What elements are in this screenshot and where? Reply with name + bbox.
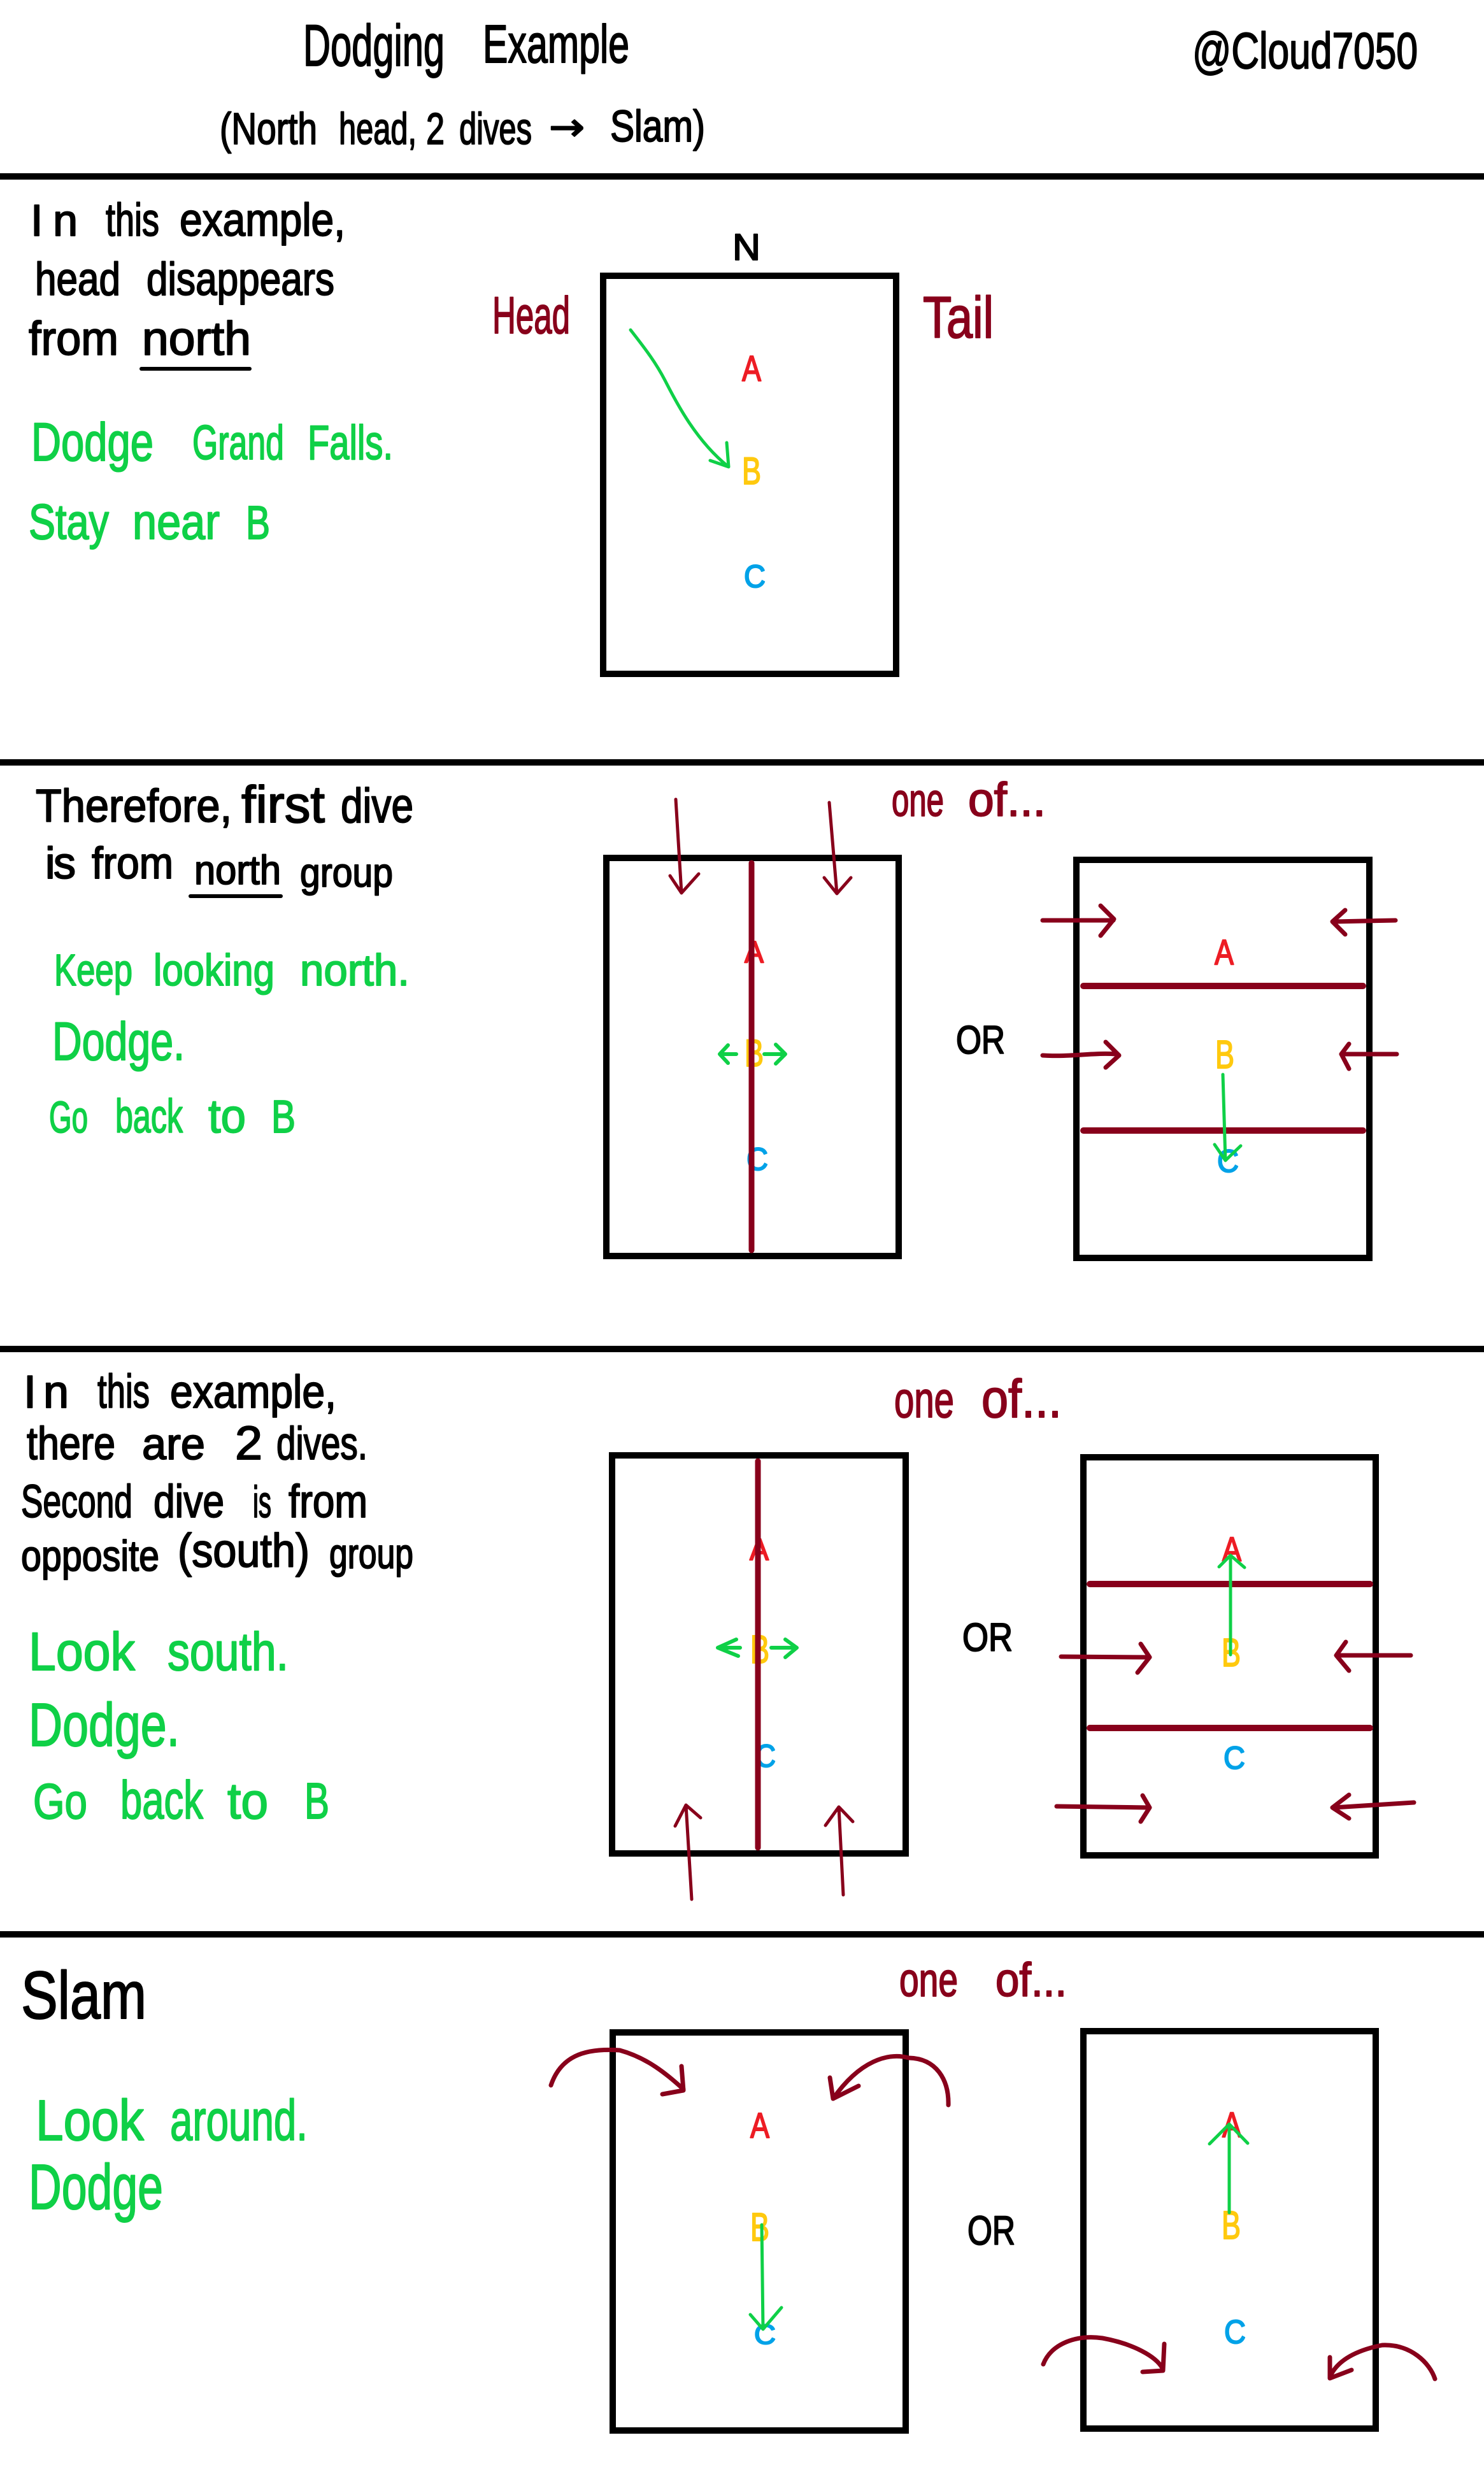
label: one of bbox=[894, 1369, 1062, 1429]
text block: green instructions: B bbox=[271, 1092, 296, 1143]
title: Dodging bbox=[303, 13, 445, 78]
text block: first dive explanation bbox=[36, 776, 413, 896]
label: one of: one bbox=[892, 775, 944, 826]
markers bbox=[745, 936, 768, 1177]
subtitle bbox=[220, 101, 705, 153]
text block: green instructions: Look bbox=[29, 1622, 136, 1681]
title: Example bbox=[483, 14, 629, 74]
text block: green instruction: Dodge bbox=[31, 412, 153, 472]
markers: C bbox=[1217, 1143, 1239, 1179]
markers: B bbox=[745, 1032, 764, 1074]
text block: green instructions: Dodge bbox=[29, 2152, 163, 2223]
subtitle: Slam) bbox=[610, 101, 705, 151]
diagram: east-west lines AoE bbox=[1057, 1457, 1414, 1855]
text block: first dive explanation: Therefore, bbox=[36, 781, 232, 832]
text block: second dive explanation: there bbox=[27, 1418, 115, 1469]
text block: green instructions: Go bbox=[33, 1773, 87, 1829]
label: head: Head bbox=[492, 287, 570, 345]
arrow: dodge north bbox=[1219, 1555, 1245, 1655]
markers bbox=[750, 1533, 776, 1774]
markers bbox=[1222, 1531, 1245, 1776]
text block: green instructions: back bbox=[120, 1770, 204, 1830]
markers: A bbox=[1222, 1531, 1241, 1569]
subtitle: dives bbox=[459, 104, 532, 153]
line attacks bbox=[1083, 986, 1363, 1131]
text block: second dive explanation: example, bbox=[170, 1367, 336, 1418]
text block: green instruction: B bbox=[246, 496, 270, 549]
diagram: slam from north bbox=[551, 2032, 948, 2430]
panel: slam bbox=[21, 1953, 1435, 2430]
label: one of bbox=[899, 1953, 1067, 2006]
markers: C bbox=[754, 2319, 776, 2350]
text block: green instructions: around. bbox=[170, 2089, 308, 2153]
subtitle: head, bbox=[339, 104, 417, 153]
text block: second dive explanation: (south) bbox=[178, 1524, 310, 1577]
text block: second dive explanation: is bbox=[253, 1477, 271, 1527]
label: OR: OR bbox=[962, 1616, 1013, 1660]
text block: first dive explanation: north bbox=[194, 847, 281, 893]
text block: second dive explanation: dives. bbox=[276, 1418, 367, 1469]
text block: second dive explanation: 2 bbox=[235, 1417, 262, 1469]
arrows: dive from north bbox=[670, 799, 851, 894]
line attack bbox=[749, 863, 754, 1250]
label: north: N bbox=[732, 227, 760, 268]
markers: A bbox=[750, 1533, 769, 1567]
markers: A bbox=[1215, 932, 1234, 972]
markers: C bbox=[744, 559, 766, 594]
arrows: curved slam north bbox=[551, 2050, 948, 2105]
text block: green instructions: south. bbox=[168, 1622, 289, 1681]
markers: B bbox=[750, 2206, 769, 2250]
subtitle: (North bbox=[220, 104, 317, 153]
markers: B bbox=[1222, 1631, 1241, 1675]
markers: A bbox=[742, 348, 761, 389]
arrows: dive from south bbox=[675, 1805, 853, 1899]
text block: green instructions: Go bbox=[49, 1092, 88, 1142]
subtitle: → bbox=[549, 105, 585, 150]
text block: second dive explanation: opposite bbox=[21, 1532, 159, 1580]
diagram: north line AoE bbox=[612, 1455, 906, 1899]
author handle: @Cloud7050 bbox=[1192, 22, 1418, 79]
arrow: dodge north bbox=[1209, 2124, 1248, 2213]
panel: first dive bbox=[36, 773, 1397, 1258]
text block: second dive explanation: In bbox=[24, 1367, 69, 1418]
diagram: slam from south bbox=[1043, 2031, 1435, 2429]
heading: slam: Slam bbox=[21, 1958, 146, 2033]
markers: B bbox=[750, 1628, 769, 1672]
text block: intro: In bbox=[31, 196, 78, 245]
markers bbox=[742, 348, 766, 594]
line attacks bbox=[1090, 1584, 1370, 1728]
label: one of: of... bbox=[968, 773, 1046, 826]
label: one of bbox=[892, 773, 1046, 826]
text block: green instruction: near bbox=[132, 494, 220, 550]
markers: C bbox=[746, 1141, 768, 1177]
text block: green instructions bbox=[29, 1622, 329, 1830]
text block: green instructions: north. bbox=[300, 945, 410, 995]
text block: green instruction: Falls. bbox=[308, 416, 393, 470]
text block: green instructions: Look bbox=[36, 2089, 145, 2153]
arrows: dive from sides bbox=[1057, 1642, 1414, 1822]
arrows: dodge sideways bbox=[720, 1045, 785, 1064]
text block: green instructions: Dodge. bbox=[29, 1691, 180, 1759]
arrows: dive from sides bbox=[1043, 906, 1397, 1069]
text block: first dive explanation: group bbox=[300, 850, 393, 896]
label: one of: of... bbox=[995, 1953, 1067, 2006]
markers: A bbox=[1222, 2104, 1242, 2145]
panel: second dive bbox=[21, 1365, 1414, 1899]
diagram: north line AoE bbox=[606, 799, 899, 1256]
markers: B bbox=[1215, 1033, 1234, 1077]
text block: first dive explanation: first bbox=[241, 776, 325, 834]
arena diagram bbox=[492, 227, 994, 674]
text block: first dive explanation: dive bbox=[341, 779, 413, 833]
markers: A bbox=[750, 2105, 770, 2145]
label: OR: OR bbox=[967, 2208, 1015, 2253]
text block: intro bbox=[29, 195, 345, 369]
panel: north head bbox=[29, 195, 994, 674]
diagram: east-west lines AoE bbox=[1043, 860, 1397, 1258]
text block: green instructions: back bbox=[115, 1090, 183, 1143]
text block: green instructions: Keep bbox=[54, 945, 132, 995]
markers bbox=[750, 2105, 776, 2350]
arrow: head to B bbox=[631, 330, 729, 467]
text block: green instructions: Dodge. bbox=[52, 1011, 185, 1071]
label: OR: OR bbox=[956, 1018, 1005, 1062]
text block: first dive explanation: from bbox=[92, 838, 173, 888]
text block: intro: this bbox=[106, 195, 159, 246]
markers bbox=[1222, 2104, 1246, 2351]
text block: green instructions: looking bbox=[153, 945, 275, 995]
subtitle: 2 bbox=[426, 104, 445, 153]
line attack bbox=[755, 1461, 760, 1848]
markers: A bbox=[745, 936, 764, 969]
text block: intro: from bbox=[29, 312, 118, 365]
label: tail: Tail bbox=[923, 285, 994, 350]
arrows: dodge sideways bbox=[718, 1639, 797, 1657]
text block: green instructions bbox=[49, 945, 410, 1143]
text block: green instruction: Stay bbox=[29, 494, 109, 550]
markers bbox=[1215, 932, 1239, 1179]
text block: second dive explanation: group bbox=[329, 1530, 413, 1577]
text block: green instruction: Grand bbox=[192, 416, 284, 470]
arrow: dodge south bbox=[750, 2225, 781, 2329]
text block: intro: head bbox=[35, 254, 120, 305]
text block: first dive explanation: is bbox=[45, 838, 76, 888]
text block: intro: example, bbox=[180, 195, 345, 246]
text block: second dive explanation: dive bbox=[153, 1476, 224, 1527]
text block: second dive explanation: are bbox=[142, 1419, 205, 1469]
label: one of: one bbox=[899, 1953, 958, 2006]
arrow: dodge south bbox=[1215, 1074, 1241, 1160]
label: one of: one bbox=[894, 1371, 954, 1428]
markers: C bbox=[1224, 2314, 1246, 2351]
text block: green instructions bbox=[29, 2089, 308, 2223]
text block: second dive explanation: Second bbox=[21, 1476, 132, 1527]
markers: C bbox=[1224, 1740, 1245, 1776]
text block: intro: disappears bbox=[146, 254, 334, 305]
text block: green instructions: B bbox=[304, 1773, 329, 1829]
title bbox=[303, 13, 629, 78]
markers: C bbox=[755, 1738, 776, 1774]
markers: B bbox=[1222, 2204, 1241, 2248]
text block: second dive explanation: this bbox=[97, 1365, 150, 1418]
markers: B bbox=[742, 450, 761, 492]
text block: green instruction bbox=[29, 412, 393, 550]
text block: second dive explanation: from bbox=[289, 1476, 367, 1527]
text block: green instructions: to bbox=[208, 1090, 246, 1143]
text block: green instructions: to bbox=[227, 1773, 268, 1829]
label: one of: of... bbox=[981, 1369, 1062, 1429]
text block: second dive explanation bbox=[21, 1365, 413, 1580]
text block: intro: north bbox=[142, 312, 251, 365]
arrows: curved slam south bbox=[1043, 2338, 1435, 2379]
